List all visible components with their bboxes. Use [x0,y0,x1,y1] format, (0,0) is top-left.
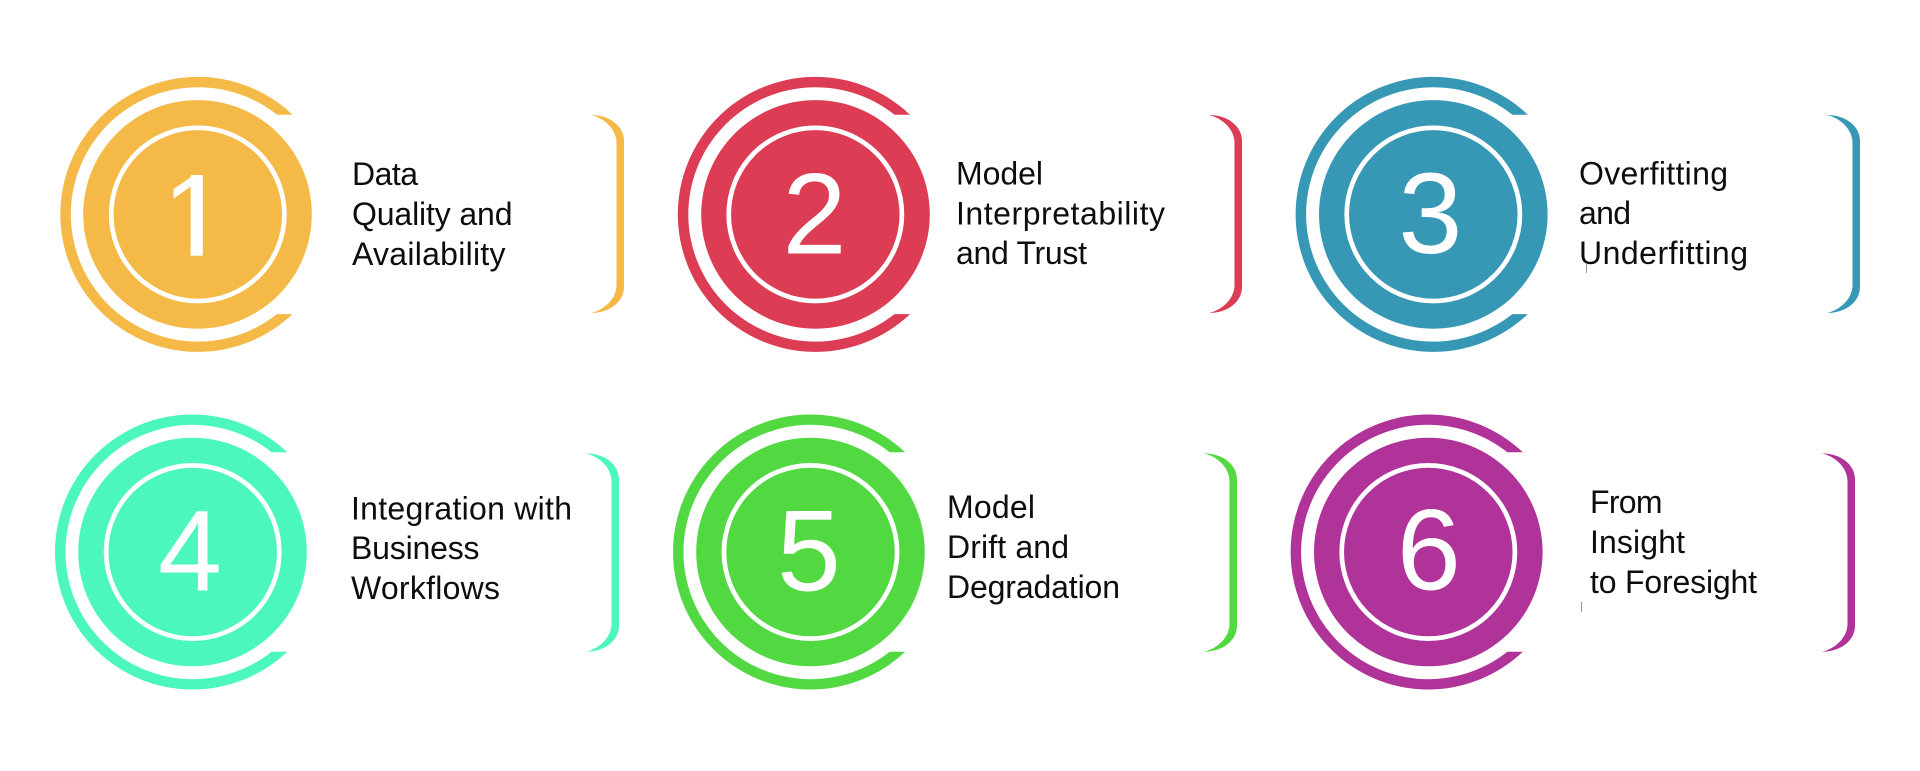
panel: item 2 interpretability [678,77,1242,352]
bracket: item 5 [1204,453,1237,652]
text: item 5 label: Model [947,489,1035,525]
text: item 3 label: and [1579,195,1631,231]
text: item 6 label: Insight [1590,524,1685,560]
bracket: item 2 [1209,115,1242,313]
text: item 2 label: and Trust [956,235,1087,271]
panel: item 1 data quality [60,77,624,352]
icon: badge 2 [678,77,930,352]
panel: item 5 model drift [673,414,1237,690]
text: item 1 label: Availability [352,236,506,272]
text: item 5 label: Degradation [947,569,1120,605]
panel: item 4 integration [55,414,619,690]
panel: item 3 overfitting [1296,77,1860,352]
text: item 1 label: Quality and [352,196,512,232]
icon: badge 4 [55,414,307,690]
icon: badge 6 [1291,414,1543,690]
bracket: item 6 [1822,453,1855,652]
text: item 2 label: Interpretability [956,196,1165,232]
bracket: item 1 [591,115,624,313]
icon: badge 5: 5 [777,488,841,616]
text: item 2 label [956,156,1165,271]
icon: badge 1: 1 [163,153,226,281]
bracket: item 4 [586,453,619,652]
text: item 6 label: to Foresight [1590,564,1757,600]
text: item 3 label: Overfitting [1579,156,1728,192]
icon: badge 2: 2 [783,150,846,278]
text: item 1 label: Data [352,156,418,192]
text: item 6 label [1590,484,1757,600]
text: item 4 label: Integration with [351,490,572,526]
text: item 5 label: Drift and [947,529,1069,565]
text: item 4 label: Business [351,530,480,566]
panel: item 6 insight to foresight [1291,414,1855,690]
text: item 3 label [1579,156,1748,271]
text: item 2 label: Model [956,156,1043,192]
icon: badge 1 [60,77,312,352]
text: item 1 label [352,156,512,272]
text: item 5 label [947,489,1120,605]
icon: badge 3 [1296,77,1548,352]
text: item 3 label: Underfitting [1579,235,1748,271]
text: item 4 label: Workflows [351,570,500,606]
bracket: item 3 [1827,115,1860,313]
icon: badge 6: 6 [1397,486,1461,614]
icon: badge 4: 4 [158,488,222,616]
text: item 6 label: From [1590,484,1662,520]
text: item 4 label [351,490,572,606]
icon: badge 5 [673,414,925,690]
icon: badge 3: 3 [1398,150,1462,278]
